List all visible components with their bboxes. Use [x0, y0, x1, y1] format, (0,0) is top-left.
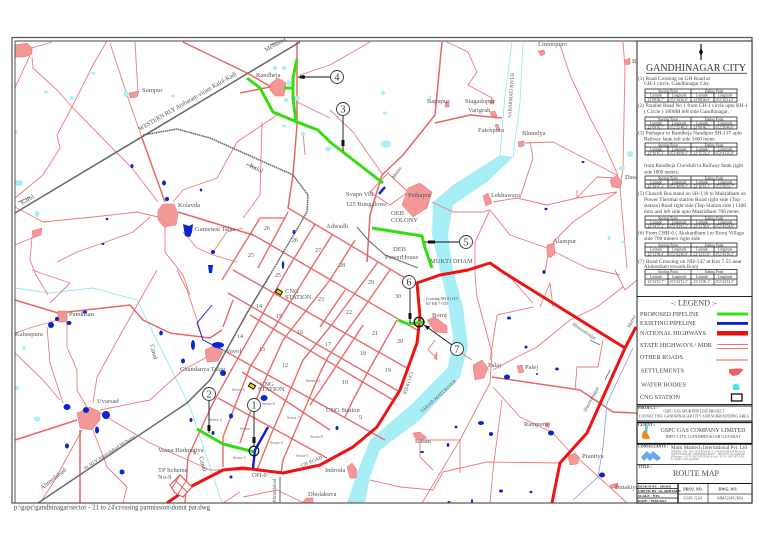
- legend: national highways: NATIONAL HIGHWAYS: [640, 330, 706, 337]
- sector numbers: 17: [325, 342, 331, 348]
- sector numbers: 25: [275, 273, 281, 279]
- table text: 072°35'48.3": [670, 125, 689, 129]
- callout 5: [425, 236, 472, 248]
- table text: 072°41'35.8": [716, 151, 735, 155]
- sector numbers: Sector-: [240, 427, 252, 431]
- map labels: Randheja: [256, 72, 281, 79]
- map labels: COLONY: [391, 217, 418, 224]
- table text: Ending Point: [705, 243, 723, 247]
- drawing info block: DWG. NO.: [718, 486, 738, 492]
- table text: 23°16'47.3": [647, 151, 665, 155]
- sector numbers: Sector-7: [287, 416, 300, 420]
- table text: Longitude: [718, 180, 733, 184]
- project block: [637, 406, 752, 421]
- drawing info block: DATE : 19/03/2013: [638, 499, 667, 503]
- table text: 072°40'09.1": [670, 151, 689, 155]
- map labels: Stagadupur: [465, 98, 495, 105]
- title block: [637, 464, 752, 484]
- title block: ROUTE MAP: [673, 469, 720, 478]
- table text: Latitude: [650, 121, 662, 125]
- map labels: Dholakuva: [308, 491, 337, 498]
- map labels: Limnopuro: [538, 41, 567, 48]
- map labels: No-9: [158, 474, 171, 481]
- table text: 23°13'09.1": [693, 280, 711, 284]
- consultants block: MMIPL-08, 601 AMRAPALI, SHAMSHAN ROAD: [671, 450, 745, 454]
- callout 6: 6: [406, 278, 412, 288]
- map labels: STATION: [285, 294, 312, 301]
- sector numbers: 26: [264, 226, 270, 232]
- consultants block: E-mail: info@mm: [671, 458, 700, 461]
- sector numbers: Sector-3: [233, 456, 246, 460]
- map labels: Varigrah: [468, 107, 491, 114]
- table text: Latitude: [696, 220, 708, 224]
- map labels: WESTERN RLY Ambaram-viram Kalol-Kadi: [138, 71, 238, 133]
- map labels: Dasa: [625, 174, 638, 181]
- table text: 23°13'10.7": [647, 280, 665, 284]
- map labels: CH ROAD: [301, 456, 324, 469]
- map labels: OEB: [391, 210, 405, 217]
- sector numbers: 9: [359, 415, 362, 421]
- map labels: NH-8 (147): [403, 371, 415, 396]
- map labels: Ahmedabad: [273, 478, 278, 503]
- table text: Latitude: [696, 94, 708, 98]
- client block: [637, 422, 752, 444]
- crossing notes: GH-1 circle, Gandhinagar City.: [644, 81, 710, 87]
- table text: 072°40'09.1": [670, 184, 689, 188]
- sector numbers: 22: [346, 310, 352, 316]
- title: Gandhinagar City: GANDHINAGAR CITY: [646, 62, 746, 74]
- sector numbers: Sector-11: [306, 379, 321, 383]
- table text: 072°42'46.9": [670, 252, 689, 256]
- map labels: Vavol: [226, 348, 241, 355]
- map labels: SABARMATI RIVER: [508, 72, 516, 118]
- consultants block: Phone: 079 26745500 Fax: 079 26745501: [671, 456, 746, 458]
- legend: CNG station: CNG STATION: [640, 394, 680, 401]
- legend heading: -: LEGEND :-: [671, 298, 717, 308]
- map labels: Himmatnagar: [571, 322, 597, 342]
- map labels: Bapupur: [427, 98, 450, 105]
- callout 4: 4: [334, 72, 340, 84]
- map labels: Kalol: [248, 162, 264, 175]
- table text: 23°13'15.6": [693, 252, 711, 256]
- table text: Ending Point: [705, 117, 723, 121]
- callout 7: 7: [454, 344, 460, 356]
- map labels: Adwadh: [326, 223, 349, 230]
- sector numbers: 14: [237, 334, 243, 340]
- river: Sabarmati: [347, 42, 523, 503]
- table text: 072°43'10.2": [716, 252, 735, 256]
- map labels: Bhundya: [522, 130, 546, 137]
- table text: 072°36'41.0": [716, 98, 735, 102]
- icon: north arrow: [699, 44, 703, 60]
- map labels: Vasna Hadmatiya: [158, 447, 204, 454]
- crossing notes: (3) Pethapur to Randheja Nandipur SH-117 upto: [638, 130, 742, 136]
- map labels: CNG Station: [326, 407, 361, 414]
- legend: [637, 296, 752, 404]
- drawing info block: DESIGN BY : SHAIK: [638, 484, 672, 488]
- sector numbers: 10: [342, 380, 348, 386]
- map labels: Mehsana: [264, 36, 287, 54]
- project block: CONNECTING GANDHINAGAR CITY AND SURROUNDING AREA: [639, 414, 749, 418]
- project block: GSPC GAS SPUR PIPELINE PROJECT: [663, 410, 725, 414]
- map labels: 125 Bungalows: [346, 201, 387, 208]
- callout 6: [402, 276, 416, 323]
- map labels: Palaj: [488, 362, 501, 369]
- canal: [15, 288, 222, 503]
- map labels: Svapn Vill: [346, 191, 374, 198]
- crossing notes: side 700 meters right side: [644, 236, 701, 242]
- table text: 072°39'33.7": [716, 184, 735, 188]
- drawing info block: MM/GSPC/RM: [717, 496, 743, 500]
- map labels: Gamewal Talav: [195, 226, 237, 233]
- sector numbers: 21: [372, 331, 378, 337]
- table text: Starting Point: [658, 243, 678, 247]
- callout 2: [202, 388, 216, 433]
- map labels: Mansa: [392, 166, 404, 180]
- sector numbers: Sector-2: [270, 441, 283, 445]
- crossing notes: (2) Parallel Road No 1 from GH-1 circle upto KH-1: [638, 102, 748, 109]
- sector numbers: 13: [259, 347, 265, 353]
- drawing info block: PROJ. NO.: [683, 486, 703, 492]
- table text: Longitude: [672, 248, 687, 252]
- callout 3: 3: [340, 104, 346, 116]
- consultants block: [637, 444, 752, 464]
- map labels: Kolavda: [178, 202, 200, 209]
- callout 5: 5: [464, 238, 468, 248]
- railways: [15, 42, 418, 503]
- file path note: p:\gspc\gandhinagar\sector - 21 to 24\crossing parmission\donut par.dwg: [14, 504, 211, 512]
- table text: Latitude: [650, 147, 662, 151]
- state highways: [15, 42, 637, 503]
- crossing notes: Railway fatak left side 3400 meter.: [644, 136, 716, 142]
- sector numbers: 19: [385, 368, 391, 374]
- table text: Ending Point: [705, 176, 723, 180]
- table text: Ending Point: [705, 270, 723, 274]
- table text: Latitude: [650, 275, 662, 279]
- map labels: OH-0: [252, 472, 267, 479]
- map labels: Alampur: [553, 238, 577, 245]
- panel: sidebar: [637, 41, 752, 503]
- table text: Longitude: [718, 220, 733, 224]
- sector road grid: [185, 208, 417, 503]
- map labels: Sompur: [142, 87, 163, 94]
- table text: Starting Point: [658, 176, 678, 180]
- table text: 072°43'12.3": [670, 280, 689, 284]
- map labels: Ahmedabad: [39, 466, 69, 492]
- table text: Longitude: [718, 275, 733, 279]
- map labels: STATION: [258, 386, 285, 393]
- sector numbers: Sector-6: [262, 402, 275, 406]
- map labels: W. RLY Ahmedabad Mehsana: [83, 434, 137, 472]
- table text: Longitude: [672, 275, 687, 279]
- sector numbers: 28: [339, 263, 345, 269]
- consultants block: VASTRAPUR, AHMEDABAD - 380 015 GUJARAT: [671, 453, 745, 456]
- map labels: Rampura: [524, 421, 548, 428]
- sector numbers: 15: [276, 314, 282, 320]
- crossing notes: (5) Chaurdi Bus stand on SH-130 to Muktidham on: [638, 190, 746, 197]
- crossing notes: Akshardham towards Boroj: [644, 264, 698, 270]
- table text: Starting Point: [658, 216, 678, 220]
- table text: Starting Point: [658, 117, 678, 121]
- project block: PROJECT :: [638, 406, 658, 410]
- consultants block: Multi Mantech International Pvt. Ltd: [671, 446, 748, 451]
- map labels: Chandanya Talav: [180, 366, 226, 373]
- sector numbers: Sector-4: [209, 418, 222, 422]
- crossing notes: Power Thermal station Road right side (Top: [644, 196, 740, 203]
- sector numbers: 18: [360, 351, 366, 357]
- legend: proposed pipeline: PROPOSED PIPELINE: [640, 311, 699, 318]
- table text: Ending Point: [705, 216, 723, 220]
- table text: 23°16'47.3": [647, 184, 665, 188]
- table text: 23°14'37.2": [647, 224, 665, 228]
- sector numbers: 29: [368, 280, 374, 286]
- table text: 072°36'40.6": [670, 98, 689, 102]
- crossing notes: (7) Road Crossing on NH-147 at Km 7.55 near: [638, 258, 742, 265]
- crossing notes: from Randheja Chowkdi to Railway fatak right: [644, 162, 743, 169]
- drawing info block: [637, 484, 752, 503]
- other roads: [15, 41, 637, 503]
- existing pipelines: [253, 187, 385, 468]
- table text: 23°08'46.7": [647, 98, 665, 102]
- drawing info block: GSPC GAS: [683, 496, 703, 500]
- map labels: PowerHouse: [385, 254, 418, 261]
- panel: map: [14, 36, 639, 503]
- callout 2: 2: [206, 390, 212, 400]
- table text: Latitude: [696, 121, 708, 125]
- sector numbers: 16: [297, 330, 303, 336]
- map labels: Butakiya: [615, 484, 639, 491]
- coordinate tables: [645, 89, 737, 285]
- table text: 072°42'41.2": [670, 224, 689, 228]
- table text: Starting Point: [658, 143, 678, 147]
- table text: [647, 89, 735, 284]
- sector numbers: Sector-8: [310, 435, 323, 439]
- table text: 072°36'40.6": [716, 125, 735, 129]
- map labels: Basan: [415, 438, 432, 445]
- consultants block: CONSULTANTS :: [638, 444, 668, 448]
- map labels: Palej: [525, 364, 538, 371]
- sector numbers: [209, 226, 403, 460]
- table text: Ending Point: [705, 143, 723, 147]
- table text: Latitude: [696, 180, 708, 184]
- crossing notes: (6) From CHH-0 ( Akshardham ) to Boroj Village: [638, 230, 745, 236]
- table text: Longitude: [672, 94, 687, 98]
- table text: Longitude: [672, 220, 687, 224]
- crossing notes: ( Circle ) 1000M left side Gandhinagar.: [644, 108, 729, 115]
- table text: Longitude: [718, 121, 733, 125]
- table text: 23°13'09.4": [647, 252, 665, 256]
- proposed pipelines: [197, 59, 432, 452]
- icon: consultant logo: [641, 451, 661, 461]
- map labels: CNG: [285, 288, 299, 295]
- map labels: Himmatnagar: [583, 386, 601, 413]
- map labels: Pethapur: [408, 192, 432, 199]
- callout 1: [248, 398, 260, 456]
- client block: GSPC GAS COMPANY LIMITED: [660, 427, 746, 434]
- map labels: [15, 36, 639, 503]
- table text: Longitude: [718, 248, 733, 252]
- crossing notes: (1) Road Crossing on GH Road at: [638, 75, 710, 82]
- table text: Longitude: [718, 94, 733, 98]
- icon: client logo: [642, 425, 650, 439]
- callout 4: [298, 70, 344, 84]
- crossing notes: side 1800 meters.: [644, 170, 679, 176]
- map labels: Boroj: [432, 312, 447, 319]
- table text: Starting Point: [658, 89, 678, 93]
- callout 7: [414, 317, 464, 356]
- callout 3: [336, 102, 350, 151]
- table text: Ending Point: [705, 89, 723, 93]
- sector numbers: 27: [315, 248, 321, 254]
- map labels: Kabaspura: [15, 331, 43, 338]
- map labels: Canal: [148, 344, 159, 360]
- drawing info block: SCALE : NTS: [638, 494, 659, 498]
- map labels: SABAR-MATI RIVER: [420, 379, 459, 414]
- sector numbers: Sector-1: [296, 454, 309, 458]
- sector numbers: 26: [292, 238, 298, 244]
- table text: Longitude: [672, 180, 687, 184]
- legend: state highways: STATE HIGHWAYS / MDR: [640, 342, 713, 349]
- table text: Starting Point: [658, 270, 678, 274]
- sector numbers: 12: [282, 363, 288, 369]
- map labels: TP Scheme: [158, 467, 188, 474]
- client block: INFO CITY, GANDHINAGAR GUJARAT: [666, 434, 741, 440]
- map labels: Crossing NH-8 (147): [426, 297, 459, 301]
- table text: Longitude: [672, 121, 687, 125]
- crossing notes: [638, 75, 748, 270]
- table text: Latitude: [696, 275, 708, 279]
- settlements: [15, 43, 630, 503]
- table text: 23°08'46.9": [693, 98, 711, 102]
- table text: 072°43'14.5": [716, 280, 735, 284]
- map labels: Lekhawara: [491, 192, 520, 199]
- map labels: Uvarsad: [97, 398, 119, 405]
- map labels: Kalol: [20, 193, 36, 207]
- sector numbers: 30: [395, 294, 401, 300]
- sector numbers: Sector-5: [232, 388, 245, 392]
- table text: Latitude: [650, 248, 662, 252]
- crossing notes: station) Road right side (Top Station side ) 1400: [644, 202, 746, 209]
- client block: CLIENT :: [638, 423, 655, 427]
- map labels: MUKTI DHAM: [430, 258, 473, 265]
- map labels: Canal: [197, 456, 208, 472]
- water bodies: [48, 161, 633, 503]
- table text: 072°43'34.8": [716, 224, 735, 228]
- table text: Latitude: [696, 147, 708, 151]
- table text: Longitude: [718, 147, 733, 151]
- legend: settlements: SETTLEMENTS: [641, 368, 684, 374]
- table text: 23°15'23.2": [693, 151, 711, 155]
- table text: 23°08'46.7": [693, 125, 711, 129]
- table text: 23°13'58.6": [693, 224, 711, 228]
- table text: Latitude: [650, 94, 662, 98]
- table text: Longitude: [672, 147, 687, 151]
- legend: existing pipeline: EXISTING PIPELINE: [640, 320, 696, 327]
- map labels: CNG: [260, 381, 274, 388]
- sector numbers: 23: [318, 297, 324, 303]
- national highway: [167, 263, 636, 503]
- map labels: Prantiya: [582, 453, 604, 460]
- table text: Latitude: [650, 220, 662, 224]
- legend: water bodies: WATER BODIES: [641, 382, 686, 388]
- map labels: Indroda: [325, 467, 345, 474]
- map labels: Mansa: [627, 314, 638, 329]
- sector numbers: 25: [248, 253, 254, 259]
- title block: TITLE :: [638, 465, 652, 469]
- map labels: KT KR 7+550: [426, 302, 448, 306]
- drawing info block: CHECK BY : R. ADHYARU: [638, 489, 681, 493]
- crossing notes: mtrs and left side upto Muktidham 700 meter.: [644, 208, 740, 215]
- map labels: Pandhsan: [69, 311, 95, 318]
- map labels: Fatehpura: [478, 127, 504, 134]
- ponds: [14, 66, 633, 422]
- table text: 23°09'05.7": [647, 125, 665, 129]
- map labels: Bi: [632, 58, 638, 65]
- table text: Latitude: [696, 248, 708, 252]
- sector numbers: 20: [397, 339, 403, 345]
- callout 1: 1: [252, 400, 256, 412]
- map labels: DEB: [393, 246, 407, 253]
- table text: Latitude: [650, 180, 662, 184]
- table text: 23°16'19.1": [693, 184, 711, 188]
- legend: other roads: OTHER ROADS: [640, 354, 683, 361]
- CNG station markers: [248, 289, 283, 389]
- sector numbers: 14: [256, 304, 262, 310]
